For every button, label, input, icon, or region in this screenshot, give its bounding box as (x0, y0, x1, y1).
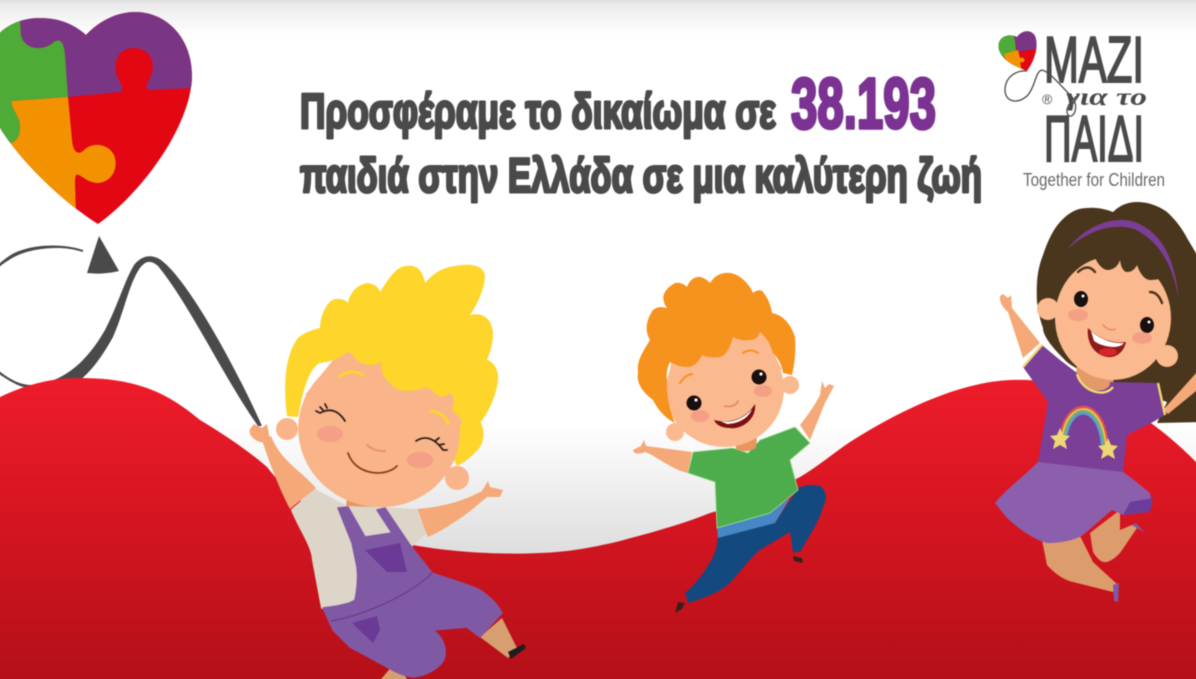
logo registered mark: ® (1042, 91, 1053, 107)
girl face (1055, 256, 1171, 380)
child: girl (995, 202, 1196, 602)
girl ears (1037, 298, 1178, 367)
heading (300, 85, 982, 203)
ginger boy jeans (685, 485, 826, 603)
boy overalls (323, 507, 502, 677)
icon: puzzle heart (0, 11, 193, 225)
girl legs (1042, 510, 1137, 592)
logo wordmark top: ΜΑΖΙ (1044, 23, 1144, 96)
girl shoes (1113, 523, 1145, 602)
girl cheeks (1068, 309, 1152, 344)
girl shirt trim (1023, 345, 1165, 415)
girl skirt underside (1123, 498, 1153, 515)
boy face (284, 338, 474, 522)
heart piece: purple (20, 11, 193, 98)
girl neck (1076, 365, 1114, 391)
heart piece: green (0, 20, 69, 144)
boy shirt (292, 490, 425, 608)
girl hair back (1037, 202, 1196, 423)
ginger boy cheeks (691, 385, 772, 422)
girl stars (1050, 428, 1118, 459)
ginger boy face (657, 324, 793, 456)
logo string (1005, 70, 1078, 116)
boy overall pockets (352, 543, 407, 643)
boy legs (373, 618, 517, 679)
stethoscope line (0, 246, 262, 426)
ginger boy shirt (688, 427, 810, 528)
ginger boy shoes (675, 556, 803, 613)
icon: triangle (87, 236, 119, 274)
heart piece: red (0, 12, 192, 225)
girl mouth (1088, 328, 1126, 357)
girl eyes (1074, 291, 1154, 333)
ginger boy mouth (714, 404, 755, 428)
logo balloon heart (998, 30, 1038, 72)
boy shoe (508, 644, 526, 659)
heart piece: orange (10, 96, 116, 209)
ginger boy brows and nose (680, 350, 758, 406)
boy arms (250, 424, 503, 537)
girl brows and nose (1078, 268, 1162, 330)
girl rainbow (1060, 407, 1108, 447)
heading line 1: Προσφέραμε το δικαίωμα σε (300, 85, 776, 139)
girl fringe (1050, 215, 1185, 302)
boy face details (316, 372, 448, 473)
child: ginger boy (633, 273, 834, 613)
girl skirt (995, 462, 1152, 543)
boy hair (285, 265, 498, 425)
girl arms (1000, 294, 1196, 414)
ginger boy neck (735, 436, 757, 451)
boy back hair (445, 412, 484, 466)
ginger boy arms (633, 381, 834, 473)
ginger boy hair (638, 273, 795, 423)
ginger boy ears (666, 376, 799, 441)
number 38.193: 38.193 (791, 65, 936, 144)
boy ears (276, 418, 469, 490)
boy overall waist seam (331, 573, 432, 621)
child: blond boy (250, 265, 526, 679)
girl shirt (1023, 345, 1165, 473)
girl headband (1067, 220, 1179, 302)
logo (995, 23, 1165, 190)
boy cheeks (317, 426, 433, 468)
logo tagline: Together for Children (1023, 170, 1165, 190)
red wave (0, 378, 1196, 679)
boy neck (346, 495, 376, 513)
logo script: για το (1066, 84, 1147, 111)
ginger boy eyes (686, 370, 766, 410)
ginger boy waistband (717, 498, 790, 538)
